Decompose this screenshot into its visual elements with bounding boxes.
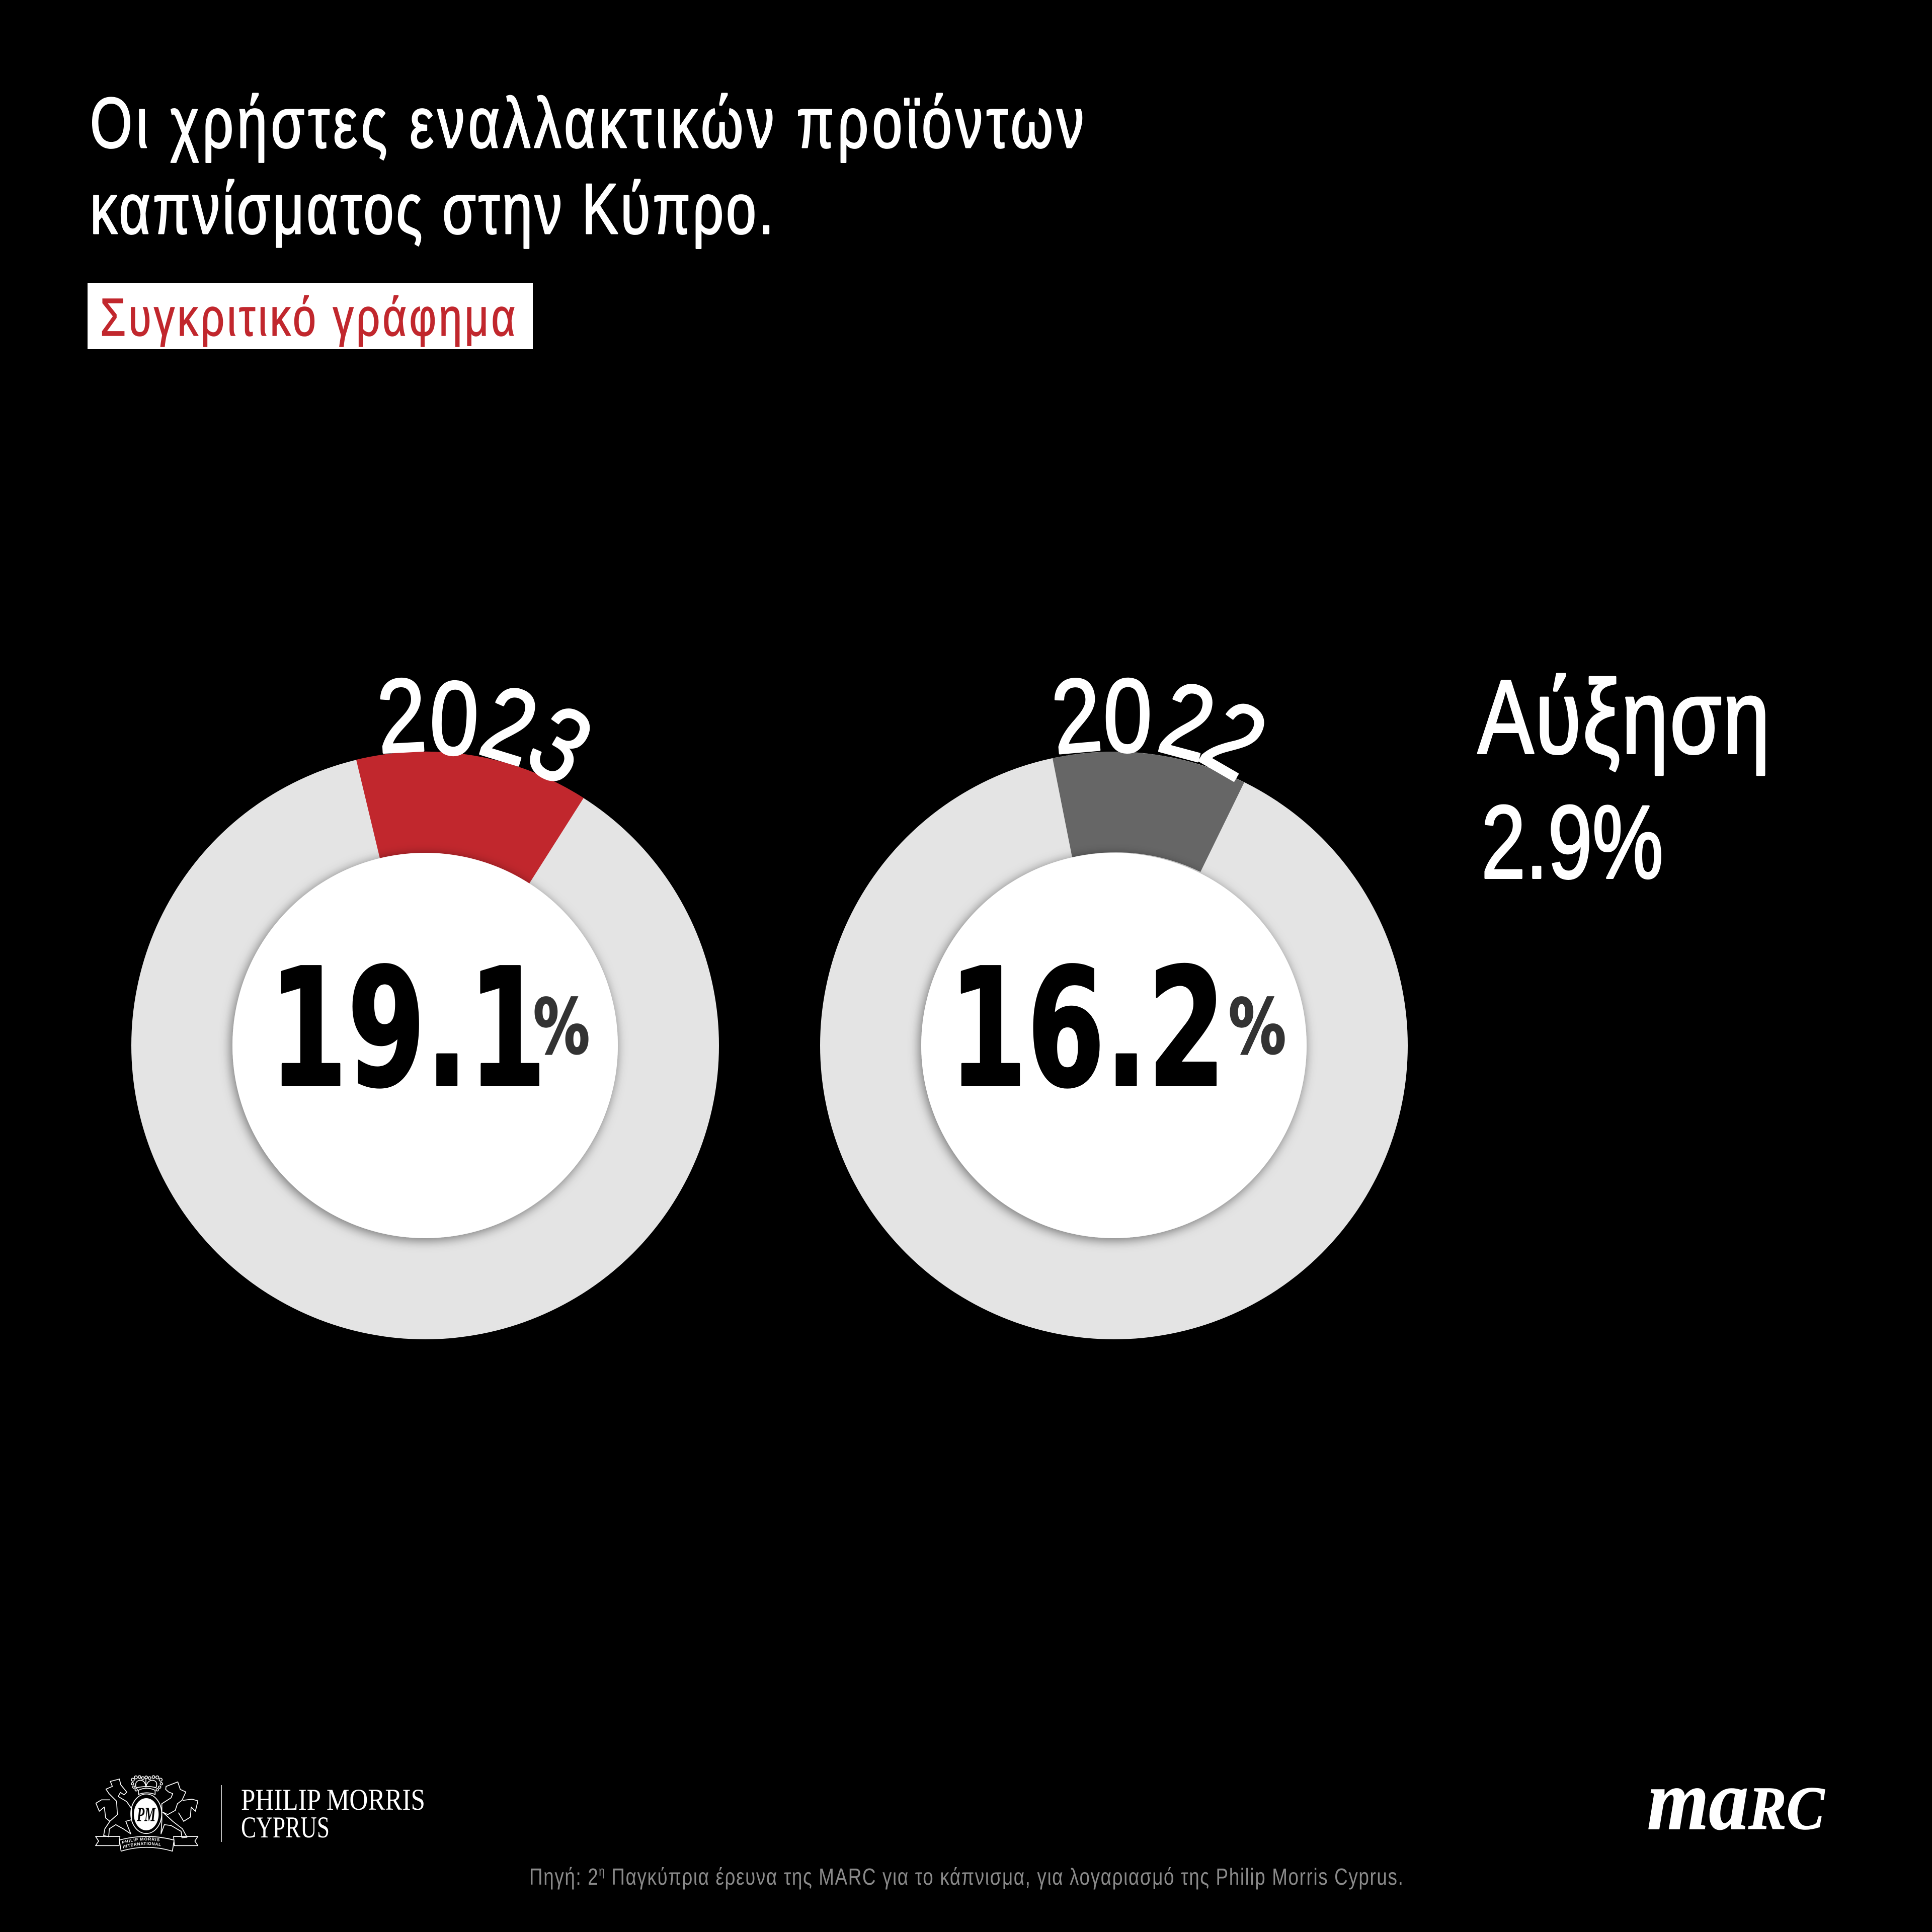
segment 19.1% [356,752,584,883]
segment 16.2% [1053,752,1244,872]
left lion [104,1779,132,1837]
icon: Philip Morris crest: INTERNATIONAL [123,1842,161,1848]
ribbon text: PHILIP MORRIS [122,1837,159,1844]
year label 2022: 2 [1047,655,1106,776]
year label 2023: 2 [469,662,550,788]
inner circle 2023 [232,853,618,1238]
year label 2023: 0 [427,658,481,778]
donut chart: 2023 [131,752,719,1339]
donut chart: 2022 [820,752,1408,1339]
year label 2023 [374,656,611,808]
logo wordmark: PHILIP MORRIS [241,1783,425,1816]
subtitle text: Συγκριτικό γράφημα [100,288,515,347]
donut ring 2023 [131,752,719,1339]
year label 2023: 2 [374,656,429,775]
logo: marc: maRC [1647,1753,1825,1847]
percent sign 2023: % [533,984,590,1071]
right lion [161,1782,187,1838]
increase callout [1478,659,1770,900]
logo wordmark: CYPRUS [241,1811,330,1844]
source note: Πηγή: 2 [529,1864,598,1890]
year label 2022: 2 [1149,658,1227,784]
title line 2: καπνίσματος στην Κύπρο. [90,169,774,249]
callout label: Αύξηση [1478,659,1770,776]
callout value: 2.9% [1481,784,1663,900]
value 16.2: 16.2 [949,933,1226,1124]
percent sign 2022: % [1229,984,1286,1071]
donut ring 2022 [820,752,1408,1339]
inner circle 2022 [921,853,1307,1238]
year label 2022: 2 [1184,677,1285,802]
year label 2023: 3 [510,682,611,808]
source note: Παγκύπρια έρευνα της MARC για το κάπνισμα, για λογαριασμό της Philip Morris Cyprus. [606,1864,1403,1890]
source note: η [599,1864,605,1879]
icon: Philip Morris crest [95,1775,198,1852]
year label 2022 [1047,655,1285,802]
logo divider [221,1785,222,1842]
value 19.1: 19.1 [269,933,546,1124]
ribbon [96,1836,120,1845]
crown [131,1776,163,1795]
subtitle tag [88,283,533,349]
PM monogram: PM [136,1803,156,1825]
title line 1: Οι χρήστες εναλλακτικών προϊόντων [90,83,1084,163]
logo wordmark [241,1783,425,1844]
oval [131,1794,162,1833]
logo: Philip Morris Cyprus [95,1775,425,1852]
title [90,83,1084,249]
year label 2022: 0 [1102,657,1153,774]
